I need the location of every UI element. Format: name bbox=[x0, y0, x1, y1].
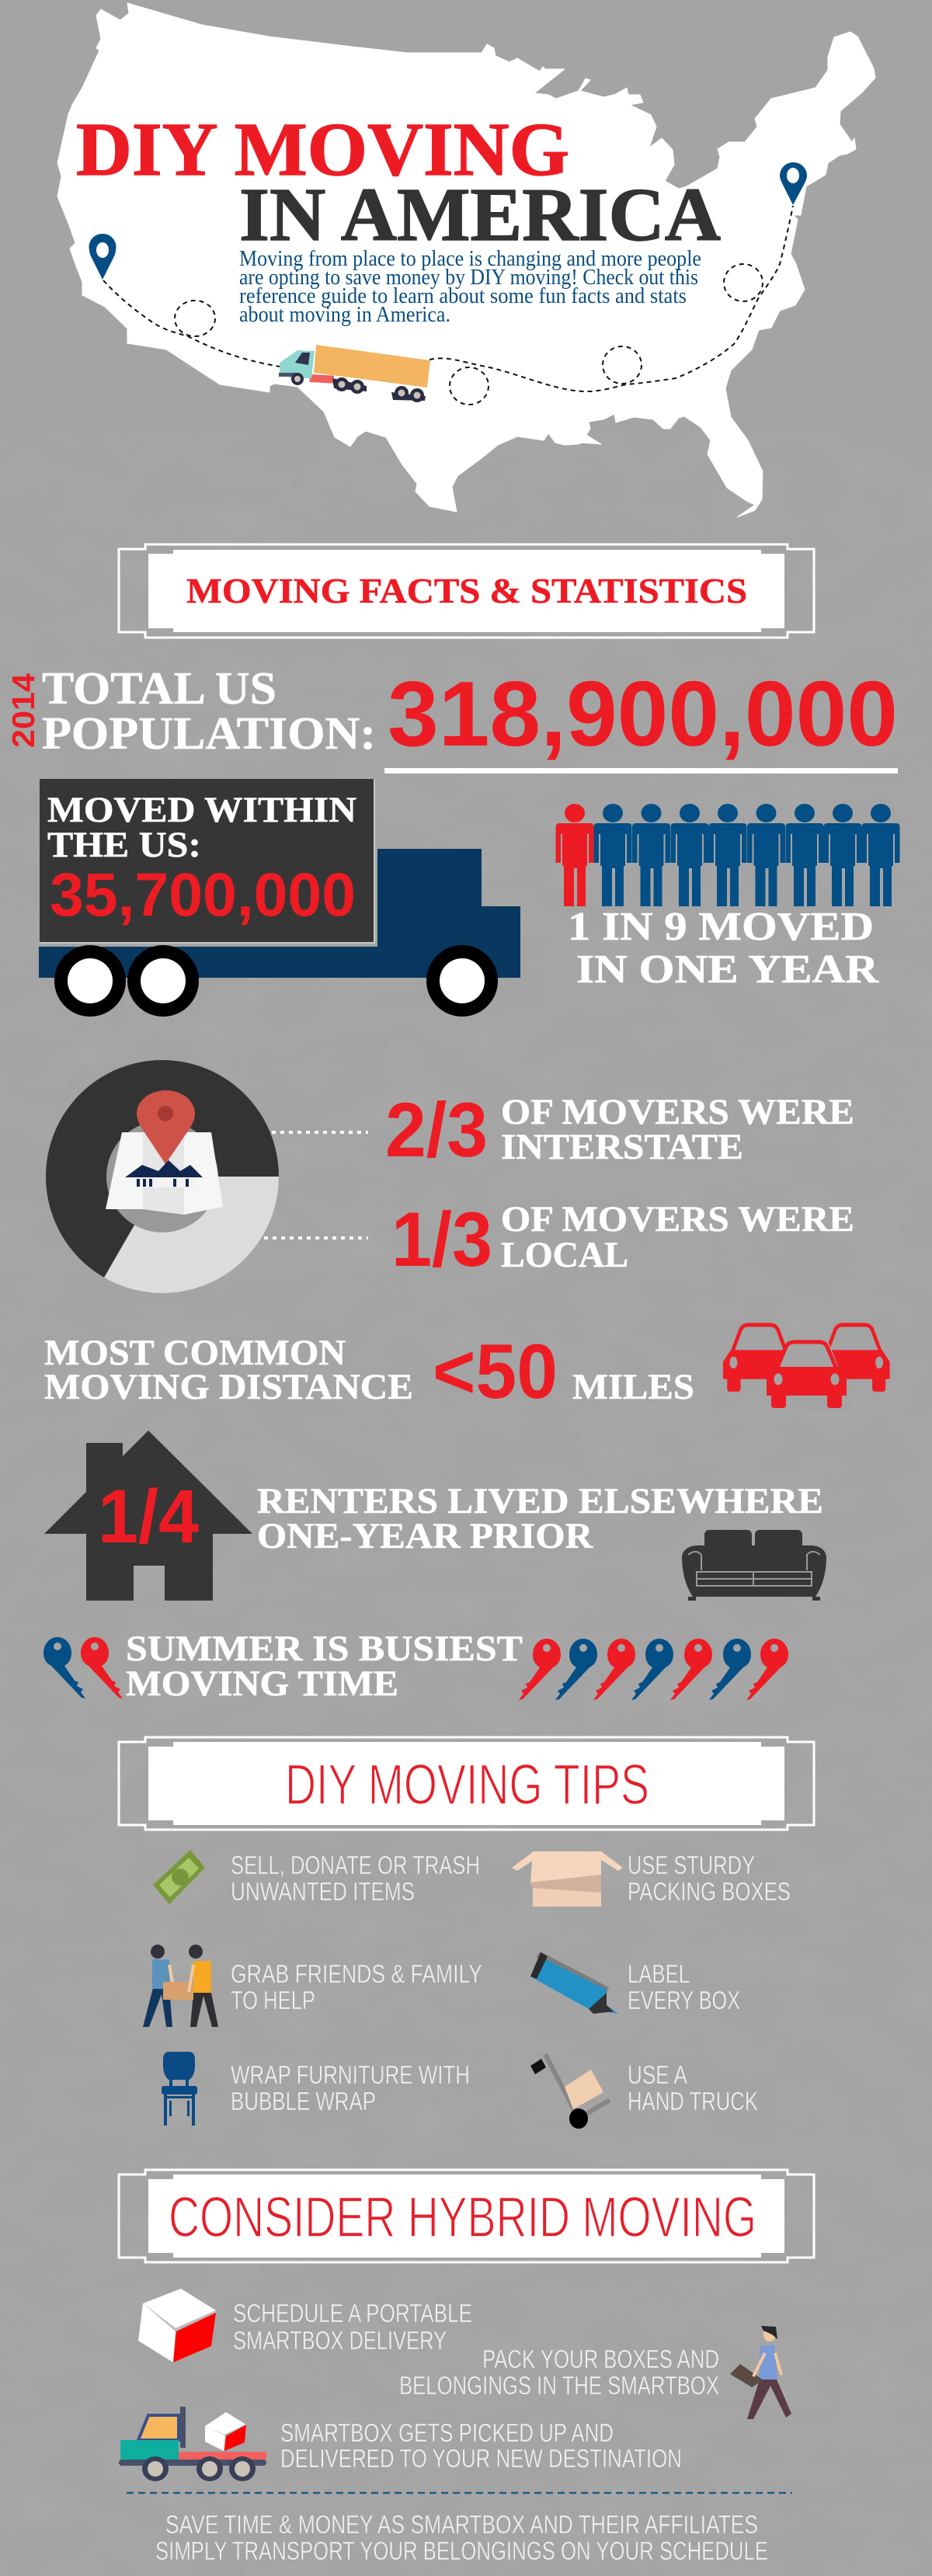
label: total us population: POPULATION: bbox=[42, 707, 376, 759]
truck box panel: THE US: bbox=[47, 825, 201, 865]
stat: 1/4 renters bbox=[44, 1431, 823, 1601]
intro paragraph: are opting to save money by DIY moving! Check out this bbox=[239, 266, 698, 290]
caption: 1 IN 9 MOVED bbox=[568, 905, 874, 949]
step: pack boxes: BELONGINGS IN THE SMARTBOX bbox=[399, 2371, 719, 2400]
tip: use a hand truck bbox=[628, 2060, 758, 2115]
closing statement: SAVE TIME & MONEY AS SMARTBOX AND THEIR AFFILIATES bbox=[165, 2510, 758, 2539]
tip: wrap furniture: WRAP FURNITURE WITH bbox=[231, 2060, 470, 2089]
stat: 2/3 interstate: INTERSTATE bbox=[501, 1127, 743, 1167]
stat: 1/3 local bbox=[391, 1196, 854, 1282]
truck box panel: MOVED WITHIN bbox=[47, 790, 356, 830]
stat: 1/3 local: 1/3 bbox=[391, 1196, 492, 1282]
intro paragraph: Moving from place to place is changing and more people bbox=[239, 247, 701, 271]
number: 318,900,000: 318,900,000 bbox=[388, 662, 898, 766]
stat: most common moving distance: <50 bbox=[433, 1328, 558, 1414]
tips list bbox=[143, 1850, 791, 2129]
icon: sofa bbox=[682, 1530, 826, 1601]
icon: hand truck bbox=[530, 2054, 610, 2129]
icon: cardboard box bbox=[512, 1851, 623, 1907]
tip: label every box: LABEL bbox=[628, 1959, 690, 1988]
tip: grab friends and family: GRAB FRIENDS & FAMILY bbox=[231, 1959, 482, 1988]
icon: right map pin bbox=[780, 162, 807, 205]
caption bbox=[568, 905, 880, 992]
tip: sturdy packing boxes: PACKING BOXES bbox=[628, 1877, 791, 1906]
icons: keys left bbox=[43, 1637, 123, 1698]
tip: sell, donate or trash bbox=[231, 1851, 480, 1906]
truck box panel: 35,700,000 bbox=[50, 860, 356, 929]
stat: 1/3 local: OF MOVERS WERE bbox=[501, 1199, 854, 1239]
caption bbox=[257, 1481, 823, 1556]
tip: sturdy packing boxes bbox=[628, 1851, 791, 1906]
title bbox=[76, 108, 721, 256]
title: DIY MOVING bbox=[76, 108, 569, 192]
caption: ONE-YEAR PRIOR bbox=[257, 1516, 593, 1556]
truck cab and bed bbox=[39, 849, 520, 978]
tip: use a hand truck: HAND TRUCK bbox=[628, 2087, 758, 2115]
header: map of America bbox=[57, 3, 875, 517]
stat: most common moving distance: MOVING DISTANCE bbox=[44, 1367, 413, 1407]
icon: two people carrying a box bbox=[143, 1945, 218, 2027]
icon: map with pin and house bbox=[106, 1090, 223, 1215]
caption: RENTERS LIVED ELSEWHERE bbox=[257, 1481, 823, 1521]
stat: most common moving distance bbox=[44, 1328, 694, 1414]
stat: 1/3 local: LOCAL bbox=[501, 1235, 628, 1275]
tip: wrap furniture bbox=[231, 2060, 470, 2115]
step: picked up and delivered: SMARTBOX GETS PICKED UP AND bbox=[280, 2418, 614, 2447]
banner: DIY moving tips bbox=[119, 1737, 814, 1830]
tip: sturdy packing boxes: USE STURDY bbox=[628, 1851, 755, 1879]
icon: forklift truck with smartbox bbox=[119, 2407, 266, 2481]
closing statement bbox=[155, 2510, 768, 2565]
icon: walking man with case bbox=[730, 2326, 791, 2419]
closing statement: SIMPLY TRANSPORT YOUR BELONGINGS ON YOUR SCHEDULE bbox=[155, 2536, 768, 2565]
icon: three cars bbox=[723, 1325, 890, 1410]
step: schedule delivery bbox=[233, 2299, 472, 2355]
icon: smartbox bbox=[138, 2289, 216, 2362]
tip: wrap furniture: BUBBLE WRAP bbox=[231, 2087, 376, 2115]
stat: 1 in 9 moved bbox=[556, 804, 899, 992]
heading: consider hybrid moving: CONSIDER HYBRID MOVING bbox=[169, 2186, 756, 2249]
step: schedule delivery: SMARTBOX DELIVERY bbox=[233, 2326, 447, 2355]
people row bbox=[556, 804, 899, 906]
truck stat: moved within the US bbox=[39, 779, 520, 1017]
intro paragraph bbox=[239, 247, 701, 327]
step: pack boxes bbox=[399, 2345, 719, 2400]
stat: most common moving distance: MILES bbox=[572, 1367, 694, 1407]
tip: sell, donate or trash: UNWANTED ITEMS bbox=[231, 1877, 415, 1906]
tip: use a hand truck: USE A bbox=[628, 2060, 687, 2089]
pie chart: interstate vs local bbox=[46, 1060, 279, 1293]
icon: money bbox=[153, 1850, 205, 1904]
title: IN AMERICA bbox=[239, 173, 721, 256]
truck box panel bbox=[40, 779, 374, 943]
map: United States silhouette bbox=[57, 3, 875, 517]
banner: consider hybrid moving bbox=[119, 2170, 814, 2262]
label: 2014: 2014 bbox=[5, 673, 41, 748]
icon: left map pin bbox=[89, 234, 116, 280]
stat: total population bbox=[5, 662, 898, 773]
icon: house bbox=[44, 1431, 252, 1601]
icon: delivery truck bbox=[279, 345, 430, 402]
intro paragraph: reference guide to learn about some fun facts and stats bbox=[239, 284, 687, 308]
dotted route with loops bbox=[103, 206, 793, 405]
caption: IN ONE YEAR bbox=[576, 947, 880, 992]
truck wheels bbox=[54, 945, 498, 1017]
tip: grab friends and family: TO HELP bbox=[231, 1986, 315, 2015]
dotted leader lines bbox=[264, 1132, 368, 1238]
stat: most common moving distance: MOST COMMON bbox=[44, 1333, 346, 1373]
step: picked up and delivered: DELIVERED TO YOUR NEW DESTINATION bbox=[280, 2444, 682, 2473]
stat: 2/3 interstate bbox=[385, 1086, 854, 1173]
tip: label every box bbox=[628, 1959, 740, 2015]
banner: moving facts and statistics bbox=[119, 544, 814, 638]
intro paragraph: about moving in America. bbox=[239, 303, 450, 327]
number: 1/4: 1/4 bbox=[98, 1474, 199, 1559]
stat: 2/3 interstate: 2/3 bbox=[385, 1086, 488, 1173]
label: total us population: TOTAL US bbox=[42, 662, 276, 714]
tip: label every box: EVERY BOX bbox=[628, 1986, 740, 2015]
step: pack boxes: PACK YOUR BOXES AND bbox=[482, 2345, 719, 2373]
tip: sell, donate or trash: SELL, DONATE OR TRASH bbox=[231, 1851, 480, 1879]
step: picked up and delivered bbox=[280, 2418, 682, 2473]
step: schedule delivery: SCHEDULE A PORTABLE bbox=[233, 2299, 472, 2327]
icon: marker pen bbox=[530, 1952, 618, 2014]
heading: moving facts: MOVING FACTS & STATISTICS bbox=[186, 571, 747, 610]
label: total us population bbox=[42, 662, 376, 759]
caption: MOVING TIME bbox=[126, 1663, 398, 1704]
heading: DIY moving tips: DIY MOVING TIPS bbox=[285, 1754, 649, 1816]
caption bbox=[126, 1629, 523, 1704]
hybrid moving steps bbox=[119, 2289, 791, 2481]
tip: grab friends and family bbox=[231, 1959, 482, 2015]
caption: SUMMER IS BUSIEST bbox=[126, 1629, 523, 1669]
stat: summer is busiest bbox=[43, 1629, 788, 1704]
icon: chair bbox=[162, 2052, 197, 2126]
icons: keys right bbox=[519, 1639, 788, 1700]
stat: 2/3 interstate: OF MOVERS WERE bbox=[501, 1092, 854, 1132]
